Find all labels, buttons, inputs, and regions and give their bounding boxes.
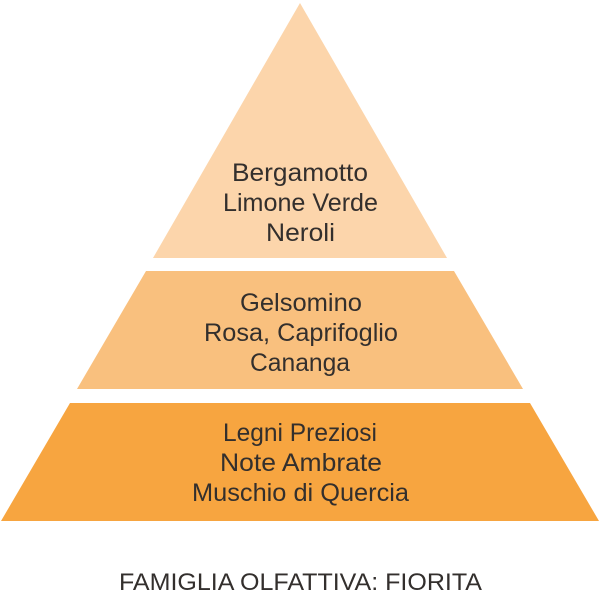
pyramid middle tier: Gelsomino, Rosa, Caprifoglio, Cananga: Rosa, Caprifoglio xyxy=(204,319,398,347)
pyramid top tier: Bergamotto, Limone Verde, Neroli: Neroli xyxy=(266,219,335,247)
pyramid bottom tier: Legni Preziosi, Note Ambrate, Muschio di Quercia xyxy=(1,403,599,521)
pyramid bottom tier: Legni Preziosi, Note Ambrate, Muschio di Quercia: Muschio di Quercia xyxy=(192,479,409,507)
pyramid middle tier: Gelsomino, Rosa, Caprifoglio, Cananga: Cananga xyxy=(250,349,350,377)
pyramid top tier: Bergamotto, Limone Verde, Neroli: Limone Verde xyxy=(223,189,378,217)
pyramid middle tier: Gelsomino, Rosa, Caprifoglio, Cananga xyxy=(77,271,523,389)
pyramid top tier: Bergamotto, Limone Verde, Neroli: Bergamotto xyxy=(232,159,368,187)
pyramid bottom tier: Legni Preziosi, Note Ambrate, Muschio di Quercia: Note Ambrate xyxy=(220,449,382,477)
pyramid bottom tier: Legni Preziosi, Note Ambrate, Muschio di Quercia: Legni Preziosi xyxy=(223,419,377,447)
pyramid middle tier: Gelsomino, Rosa, Caprifoglio, Cananga: Gelsomino xyxy=(240,289,362,317)
pyramid top tier: Bergamotto, Limone Verde, Neroli xyxy=(153,3,447,258)
